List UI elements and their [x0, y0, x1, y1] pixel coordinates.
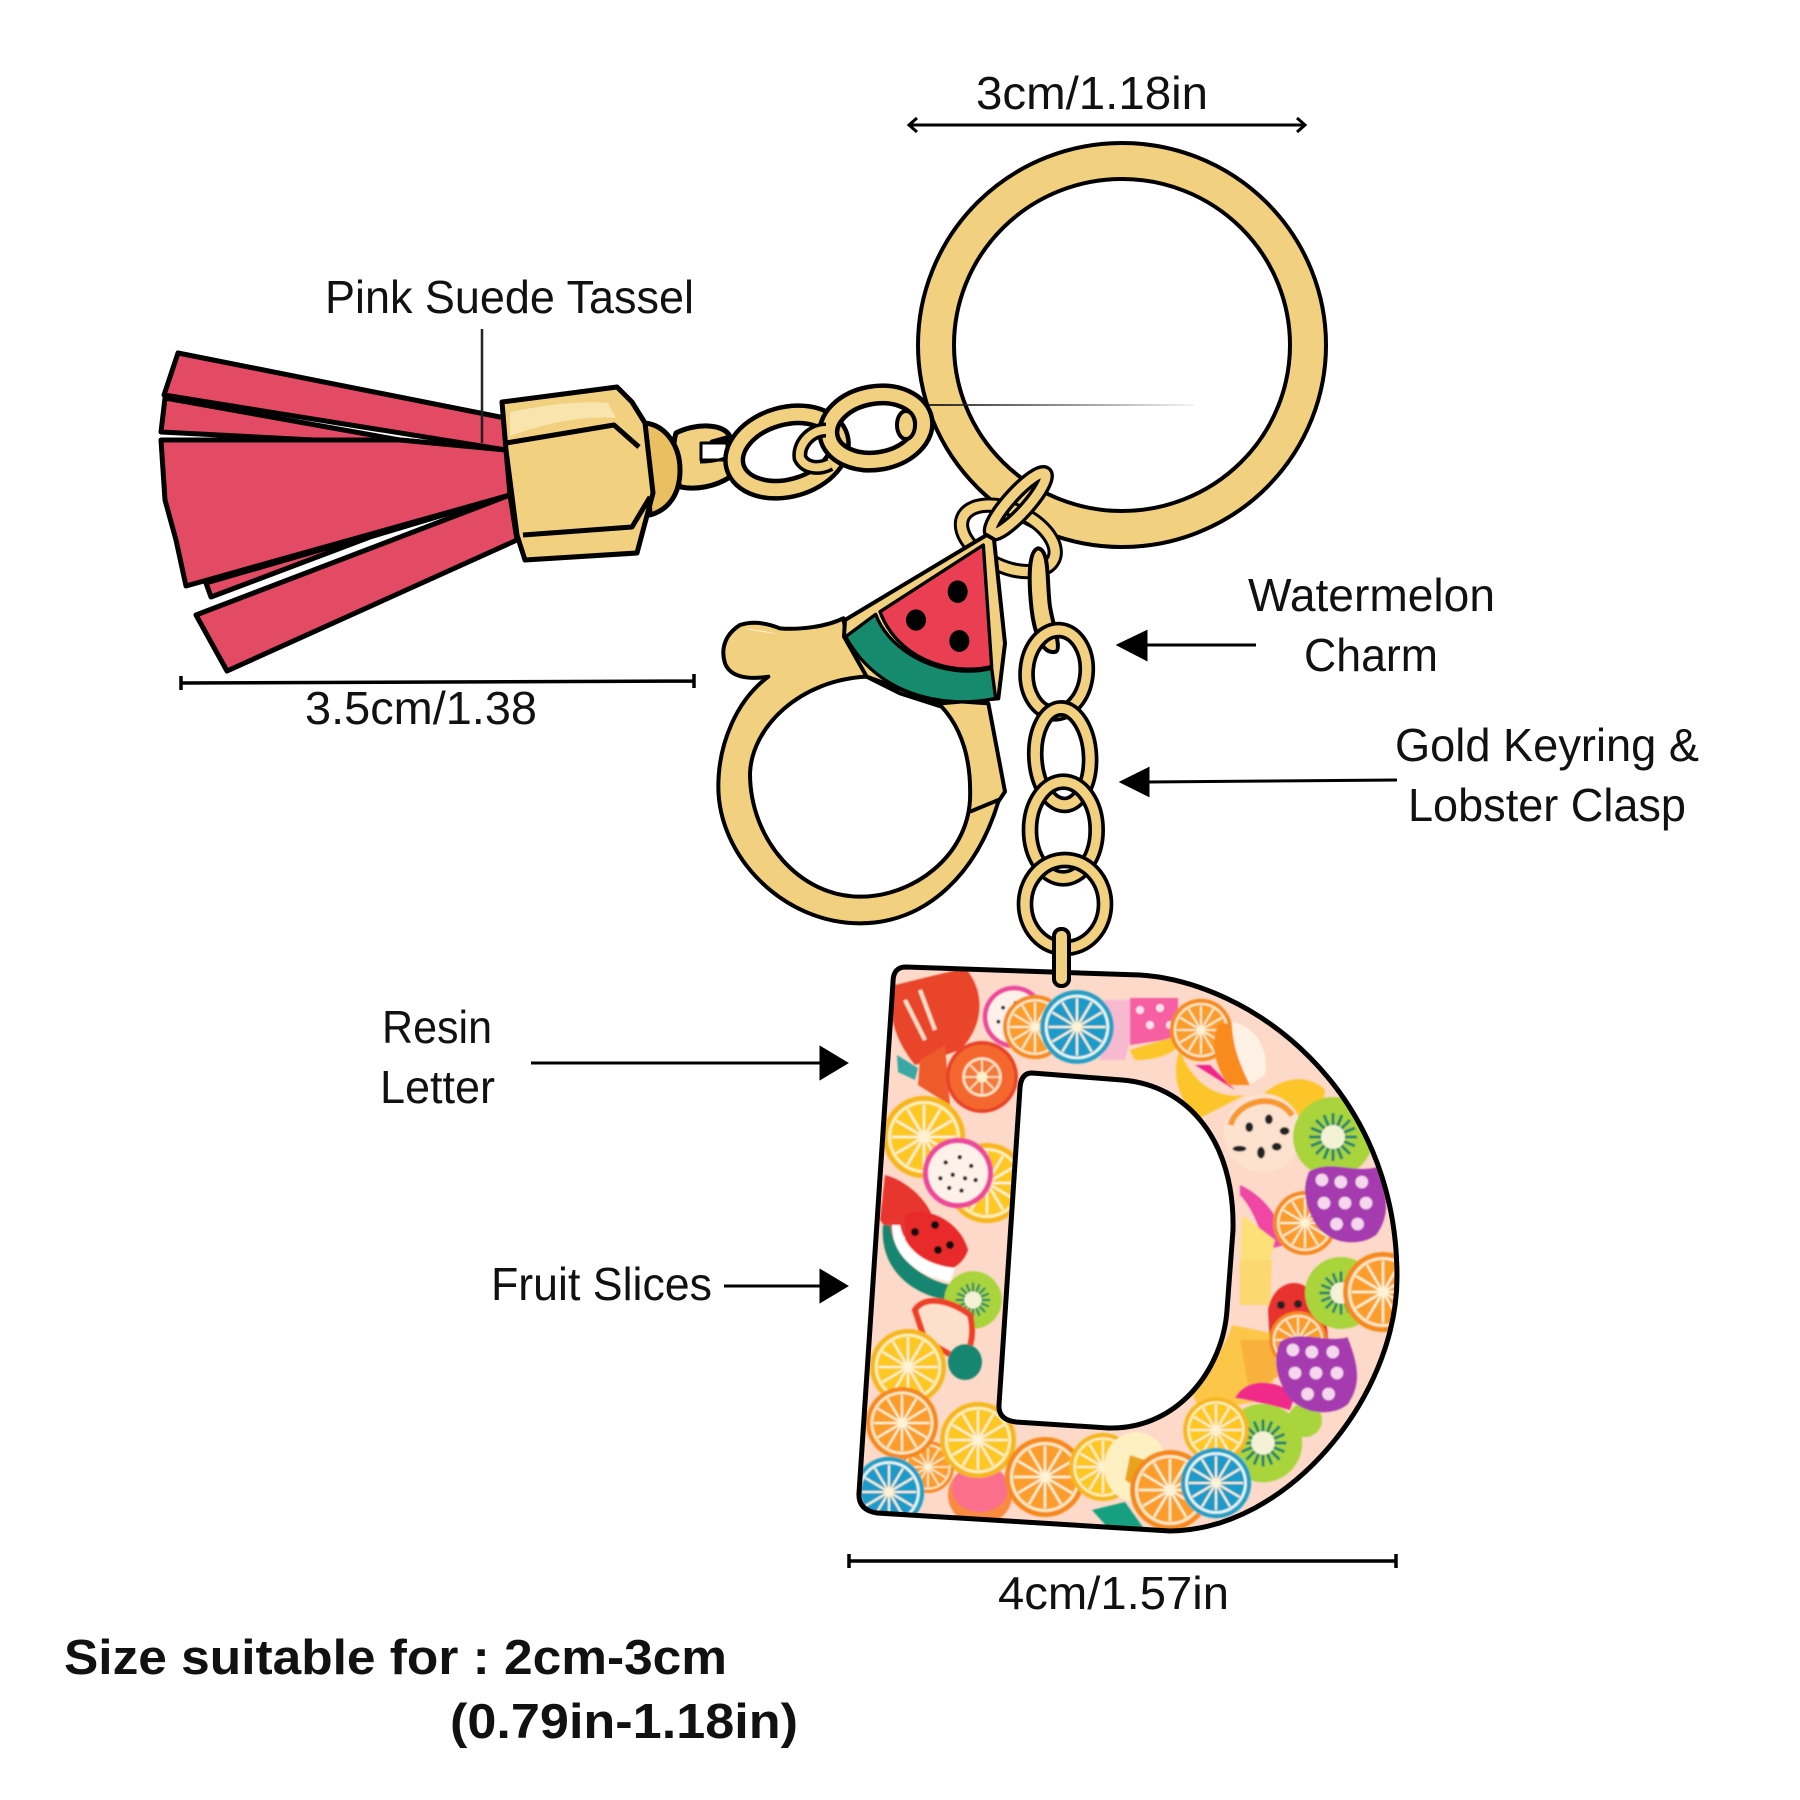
thin line crossing ring [914, 404, 1194, 406]
clasp and chain assembly [718, 467, 1105, 948]
chain link 4 [1030, 782, 1097, 878]
label second line: Letter [380, 1061, 495, 1113]
size note [64, 1631, 798, 1749]
chain link 3 [1033, 707, 1092, 806]
charm gold frame [844, 535, 1005, 703]
label: 4cm/1.57in: 4cm/1.57in [998, 1567, 1229, 1619]
dimension arrow: ring width [909, 118, 1305, 132]
label: Resin [382, 1001, 492, 1053]
clasp highlight [745, 628, 777, 634]
watermelon seeds [906, 580, 969, 652]
chain link 1 [1030, 548, 1058, 652]
tassel label: Pink Suede Tassel: Pink Suede Tassel [325, 271, 694, 323]
arrow [1119, 632, 1256, 659]
dimension: tassel width [181, 674, 694, 734]
callout: gold keyring and lobster clasp [1122, 719, 1699, 831]
tassel: pink suede strips [161, 353, 517, 671]
label: Gold Keyring & [1395, 719, 1699, 771]
link A overlap detail [800, 430, 830, 467]
link overlap gold [800, 430, 830, 467]
label second line: Lobster Clasp [1408, 779, 1686, 831]
label: 3.5cm/1.38: 3.5cm/1.38 [305, 682, 537, 734]
letter outline [859, 967, 1397, 1531]
dimension: key ring width [909, 67, 1305, 132]
callout: resin letter [380, 1001, 846, 1113]
gold swivel connector [645, 423, 739, 515]
callout: watermelon charm [1119, 569, 1495, 681]
chain link 2 [1023, 628, 1090, 716]
arrow [724, 1271, 846, 1301]
resin letter D [850, 967, 1423, 1531]
link B far end detail [897, 411, 915, 439]
label: 3cm/1.18in: 3cm/1.18in [976, 67, 1208, 119]
chain link B [823, 387, 929, 469]
label: Watermelon [1248, 569, 1495, 621]
jump ring behind clasp [951, 492, 1066, 585]
size note line 1: Size suitable for : 2cm-3cm [64, 1631, 727, 1685]
letter hanger pin over letter edge [1054, 929, 1069, 986]
clasp gate line [970, 799, 1000, 812]
fruit slices inside letter [850, 968, 1423, 1530]
chain link A [725, 403, 849, 501]
watermelon flesh [880, 545, 992, 669]
chain link 5 [1025, 860, 1105, 948]
gold key ring [936, 161, 1308, 529]
callout: fruit slices [491, 1258, 846, 1310]
watermelon rind [846, 614, 996, 702]
size note line 2: (0.79in-1.18in) [450, 1695, 798, 1749]
watermelon charm [844, 535, 1005, 703]
label: Fruit Slices [491, 1258, 712, 1310]
tassel leader line [481, 329, 483, 443]
dimension: letter width [849, 1554, 1396, 1619]
label second line: Charm [1304, 629, 1438, 681]
tassel gold cap [502, 387, 653, 560]
lobster clasp body [718, 618, 1005, 923]
tilted connector link on ring [985, 467, 1052, 539]
arrow [1122, 769, 1397, 795]
letter fill [859, 967, 1397, 1531]
arrow [531, 1048, 846, 1078]
